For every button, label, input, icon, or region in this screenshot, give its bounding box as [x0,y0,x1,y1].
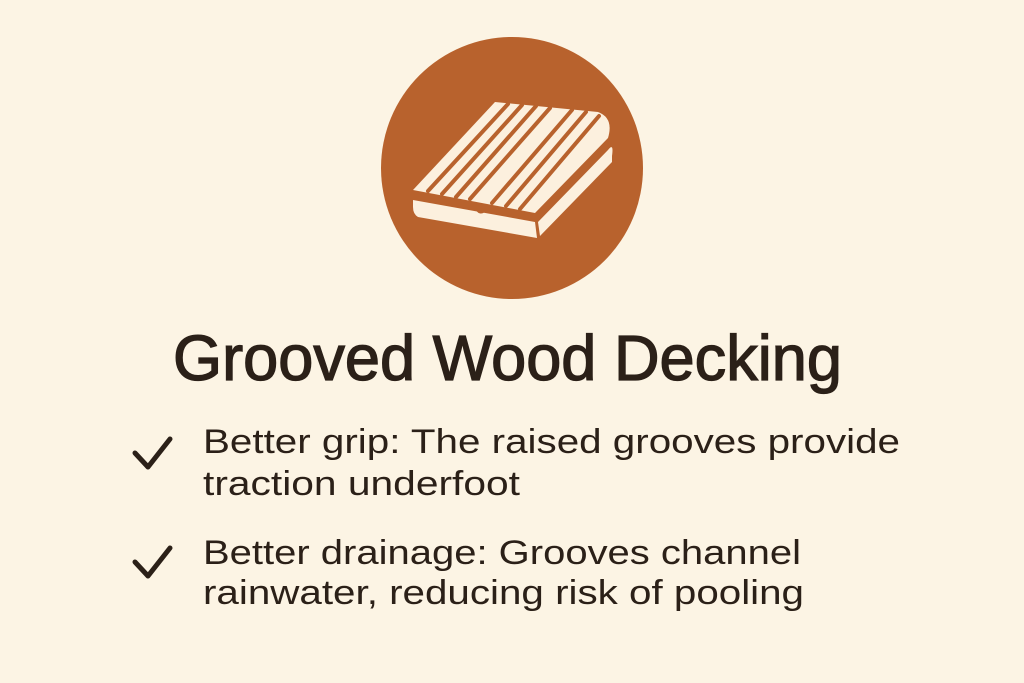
icon: check 2 [135,548,170,576]
grooves [428,104,599,209]
icon: check 1 [135,439,170,467]
icon: grooved deck board in circle [381,37,643,299]
bullet 1: traction underfoot [203,465,521,503]
front face [413,200,537,238]
top face [413,102,610,213]
bullet 1: Better grip: The raised grooves provide [203,423,900,461]
title: Grooved Wood Decking [173,322,842,394]
bullet 2 [135,534,804,612]
bullet 1 [135,423,900,503]
bullet 2: rainwater, reducing risk of pooling [203,574,804,612]
right side face [538,147,612,236]
bullet 2: Better drainage: Grooves channel [203,534,801,572]
